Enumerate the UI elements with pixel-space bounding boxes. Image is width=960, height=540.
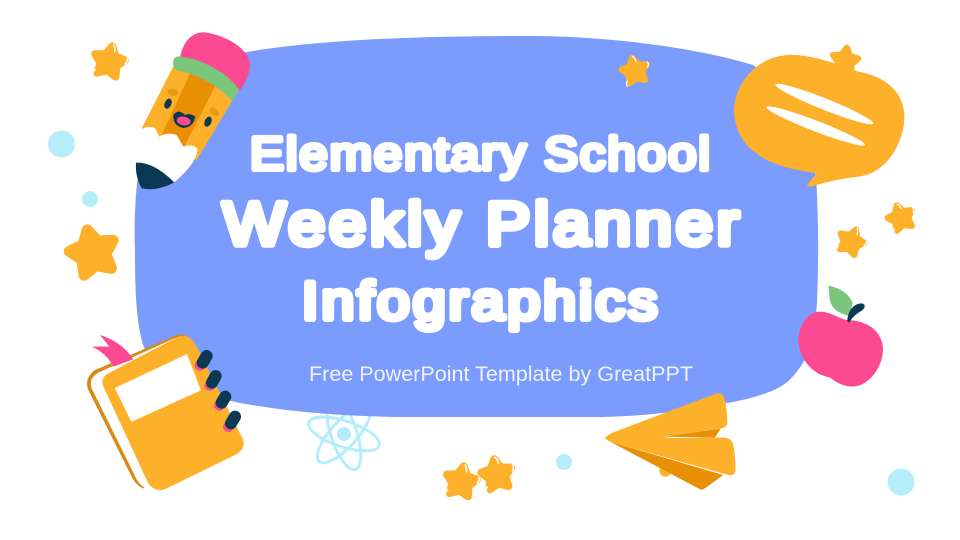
pencil wood tip — [137, 127, 197, 182]
dot: bottom right — [888, 468, 914, 496]
pencil centre stripe — [162, 70, 217, 148]
star: right lower — [834, 224, 870, 260]
star: behind speech bubble — [831, 46, 859, 73]
star: top left — [91, 41, 130, 81]
notebook cover — [102, 336, 244, 490]
notebook label — [116, 355, 200, 421]
title line 3: Infographics — [302, 271, 657, 330]
icon: paper plane — [605, 393, 735, 490]
icon: atom — [305, 395, 383, 473]
star: top centre — [620, 54, 652, 87]
small star behind plane — [659, 465, 671, 477]
pencil band — [173, 57, 239, 102]
icon: speech bubble — [734, 55, 904, 187]
title line 2: Weekly Planner — [223, 191, 739, 258]
pencil face — [163, 88, 221, 128]
pencil eraser — [180, 32, 250, 91]
notebook bookmark — [92, 335, 133, 367]
subtitle: Free PowerPoint Template by GreatPPT — [309, 363, 693, 386]
dot: left lower — [82, 191, 98, 207]
star: right upper — [884, 200, 919, 235]
star: left large — [65, 225, 119, 277]
dot: left upper — [48, 130, 75, 158]
notebook back edge — [87, 335, 188, 489]
icon: pencil — [136, 32, 250, 189]
icon: apple — [798, 286, 883, 387]
icon: notebook — [87, 335, 244, 490]
pencil body — [142, 65, 237, 160]
plane inner fold — [663, 429, 721, 438]
plane top wing — [605, 393, 727, 443]
star: bottom left — [443, 462, 482, 501]
speech bubble lines — [765, 79, 875, 150]
apple stem — [847, 303, 865, 323]
title line 1: Elementary School — [250, 129, 710, 180]
pencil lead — [136, 163, 174, 189]
star: bottom right — [479, 454, 517, 494]
apple body — [798, 312, 883, 387]
plane shadow fold — [610, 442, 723, 490]
panel: blue title blob — [135, 36, 818, 417]
notebook rings — [200, 356, 235, 427]
plane lower wing — [605, 438, 735, 475]
dot: bottom centre — [556, 454, 572, 470]
apple leaf — [828, 286, 853, 316]
title — [223, 129, 739, 330]
notebook pages — [91, 337, 190, 489]
